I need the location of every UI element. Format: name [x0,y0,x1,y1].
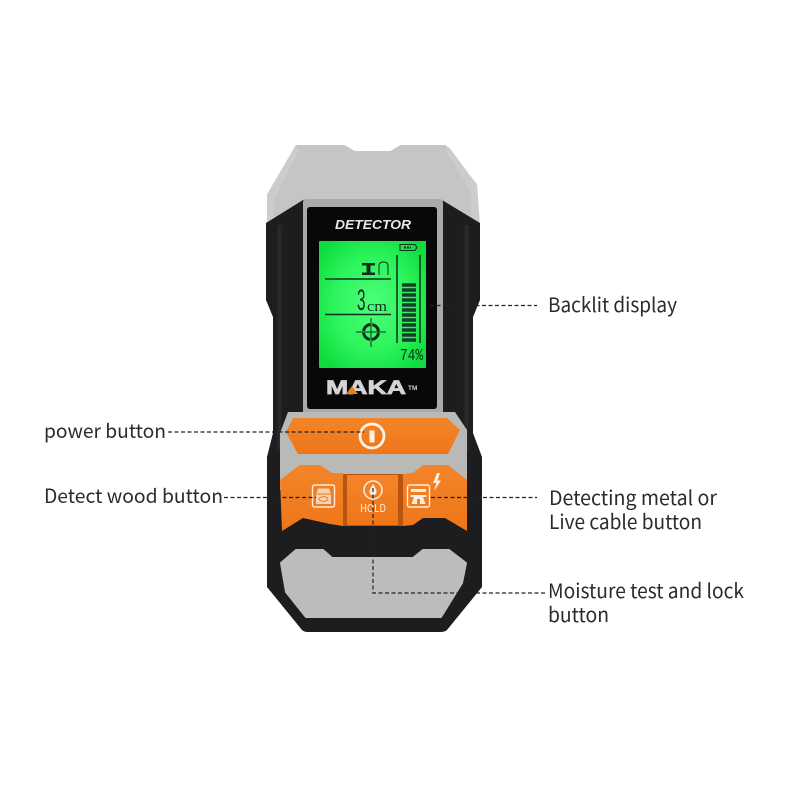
leader: detect wood button [224,496,316,498]
label: moisture button: button [548,599,609,628]
wood button [280,465,343,531]
top gray cap [269,147,478,225]
lcd background [319,241,426,368]
label: metal button: Detecting metal or [549,482,717,511]
maka logo: MAKA [326,378,406,399]
label: metal button: Live cable button [549,506,702,535]
power icon [360,424,384,448]
leader: metal button [431,496,537,498]
unit cm: cm [367,299,387,315]
metal cable button [403,465,467,531]
target crosshair [356,318,386,347]
wood icon [312,485,334,507]
distance digit: 3 [357,284,366,317]
battery icon [400,244,417,250]
label: detect wood button: Detect wood button [44,480,223,509]
metal icon [408,485,430,507]
callout: moisture test and lock button [373,488,744,628]
leader: backlit display [430,304,537,306]
power button [286,418,460,454]
label: moisture button: Moisture test and lock [548,575,744,604]
right side highlight [463,225,470,456]
percent reading: 74% [400,347,424,366]
moisture icon [364,481,382,499]
leader: power button [168,431,364,433]
magnet icon [379,262,388,275]
moisture hold button [347,475,398,525]
lightning icon [433,473,441,491]
lcd row lines [325,279,391,314]
bar gauge [397,255,420,343]
callout: metal or live cable button [431,482,717,535]
leader: moisture button [373,488,547,593]
maka logo: TM [408,385,417,392]
bottom gray grip [281,550,466,617]
black body [266,200,482,632]
label: power button: power button [44,415,166,444]
gray button band [280,412,467,490]
screen bezel [303,199,443,414]
beam icon [362,263,375,275]
label: backlit display: Backlit display [548,289,678,318]
lcd display [319,241,426,368]
hold label: HOLD [360,500,386,516]
detector heading: DETECTOR [335,217,412,232]
cap left facet [267,147,299,228]
device [266,147,482,632]
cap right facet [445,147,480,228]
maka logo [326,378,417,399]
screen black panel [307,207,437,409]
button gap [342,474,404,526]
left side highlight [276,225,283,456]
